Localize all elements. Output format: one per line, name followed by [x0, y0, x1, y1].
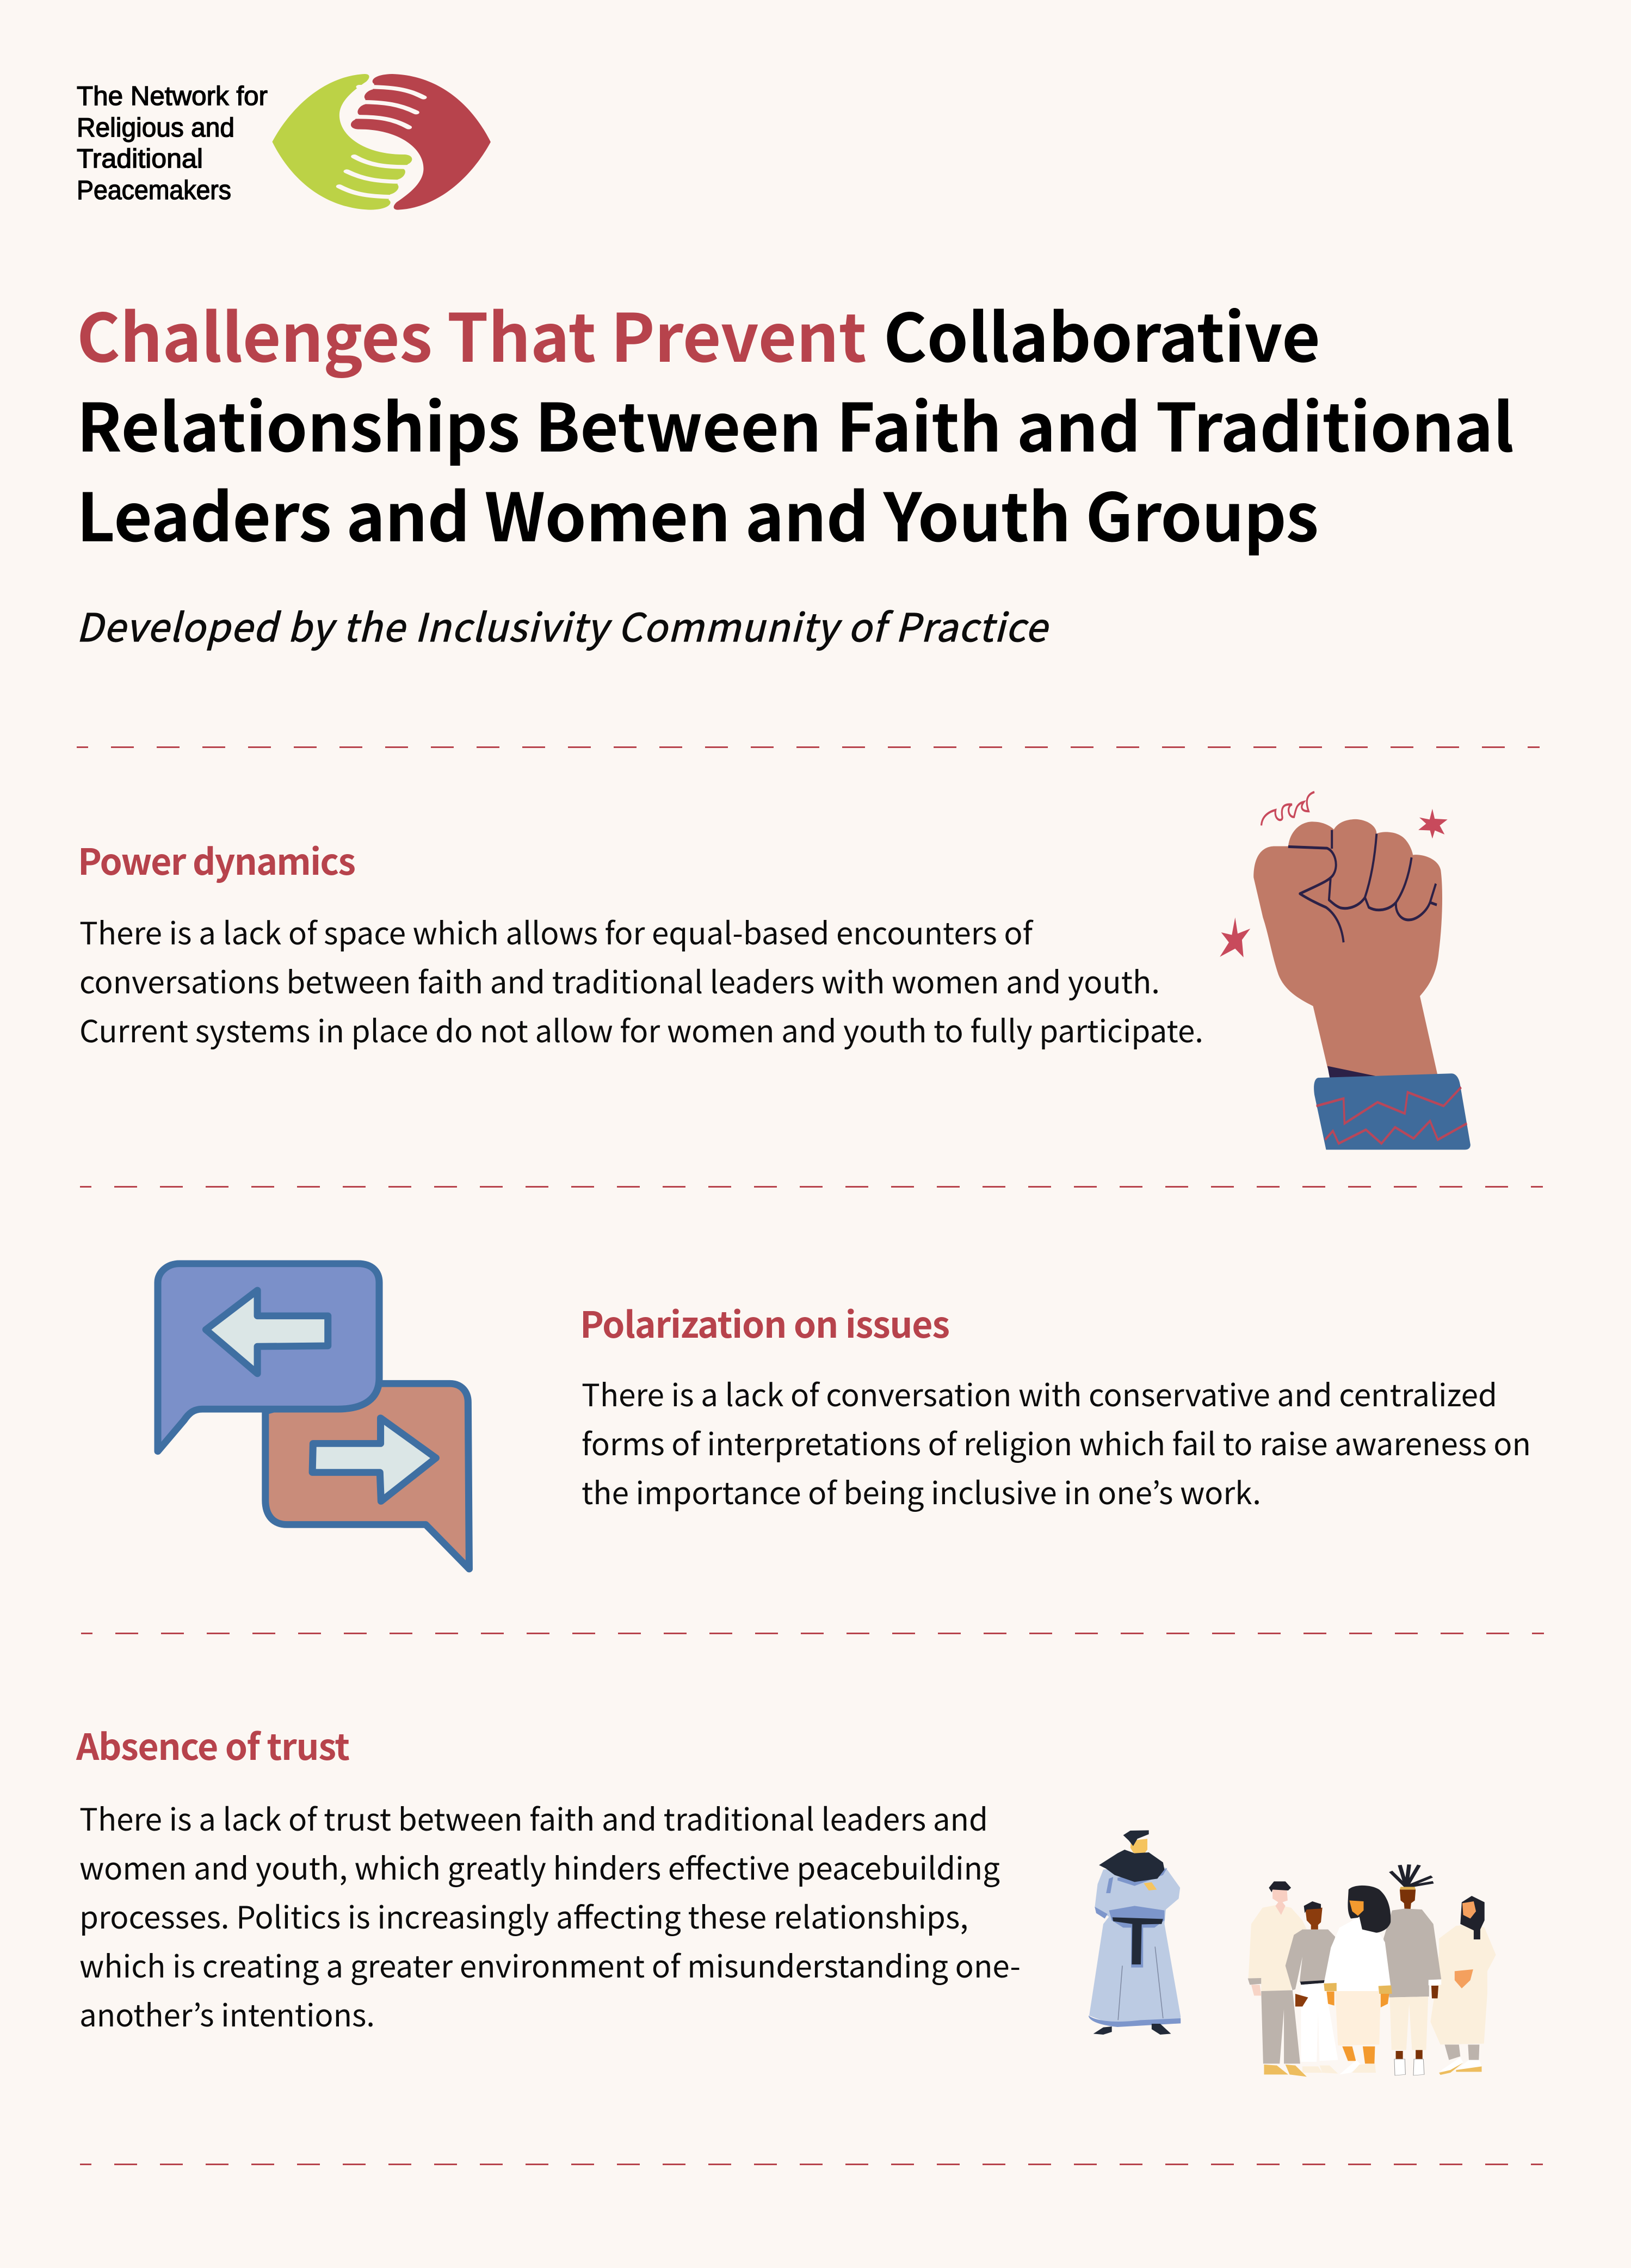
salmon bubble with right arrow [265, 1383, 469, 1569]
illustration: faith leader and group [1089, 1830, 1496, 2077]
text block: power dynamics: conversations between faith and traditional leaders with women and youth. [79, 958, 1160, 1003]
section: polarization [580, 1296, 1531, 1513]
logo wordmark [77, 82, 268, 205]
logo wordmark: Traditional [77, 144, 203, 174]
title [77, 285, 1514, 561]
logo wordmark: Peacemakers [77, 176, 231, 205]
shadow band at wrist [1327, 1066, 1376, 1079]
fist hand [1253, 819, 1442, 1076]
section: power dynamics [78, 833, 1203, 1052]
text block: polarization: There is a lack of conversation with conservative and centralized [582, 1371, 1497, 1416]
logo wordmark: The Network for [77, 82, 268, 111]
star marks and squiggle [1220, 792, 1448, 957]
subtitle: Developed by the Inclusivity Community of Practice [76, 597, 1050, 653]
person: woman in hijab [1430, 1896, 1496, 2075]
text block: absence of trust: which is creating a greater environment of misunderstanding one- [79, 1942, 1021, 1987]
text block: power dynamics: Current systems in place do not allow for women and youth to fully participate. [79, 1007, 1203, 1052]
heading: polarization: Polarization on issues [580, 1296, 950, 1349]
text block: absence of trust: processes. Politics is increasingly affecting these relationships, [79, 1893, 968, 1938]
red hand [350, 74, 491, 210]
section: absence of trust [76, 1719, 1021, 2036]
person: tall figure with locs [1383, 1864, 1441, 2075]
title: Challenges That Prevent [77, 285, 867, 381]
icon: speech bubbles with arrows [158, 1264, 469, 1569]
text block: power dynamics [79, 909, 1203, 1052]
sleeve cuff [1314, 1073, 1471, 1150]
logo emblem: two hands [272, 74, 491, 210]
person: man in cream shirt [1248, 1881, 1307, 2077]
title: Relationships Between Faith and Traditional [77, 375, 1514, 471]
person: boy in grey shirt [1286, 1901, 1338, 2074]
title: Leaders and Women and Youth Groups [77, 465, 1319, 561]
text block: polarization: the importance of being inclusive in one’s work. [582, 1469, 1261, 1513]
title: Collaborative [884, 285, 1320, 381]
heading: absence of trust: Absence of trust [76, 1719, 350, 1771]
group of women and youth [1248, 1864, 1496, 2077]
green hand [272, 74, 412, 210]
text block: power dynamics: There is a lack of space which allows for equal-based encounters of [79, 909, 1034, 954]
finger lines [1288, 830, 1437, 942]
text block: polarization: forms of interpretations of religion which fail to raise awareness on [582, 1420, 1531, 1464]
text block: polarization [582, 1371, 1531, 1513]
text block: absence of trust: women and youth, which greatly hinders effective peacebuilding [79, 1844, 1000, 1889]
text block: absence of trust [79, 1795, 1021, 2036]
faith leader [1089, 1830, 1181, 2035]
cuff zigzags [1317, 1087, 1467, 1144]
blue bubble with left arrow [158, 1264, 379, 1451]
heading: power dynamics: Power dynamics [78, 833, 356, 886]
logo wordmark: Religious and [77, 113, 234, 143]
logo [77, 74, 491, 210]
person: woman with long hair [1324, 1886, 1392, 2074]
icon: raised fist [1220, 792, 1471, 1150]
text block: absence of trust: There is a lack of trust between faith and traditional leaders and [79, 1795, 988, 1840]
text block: absence of trust: another’s intentions. [79, 1991, 375, 2036]
